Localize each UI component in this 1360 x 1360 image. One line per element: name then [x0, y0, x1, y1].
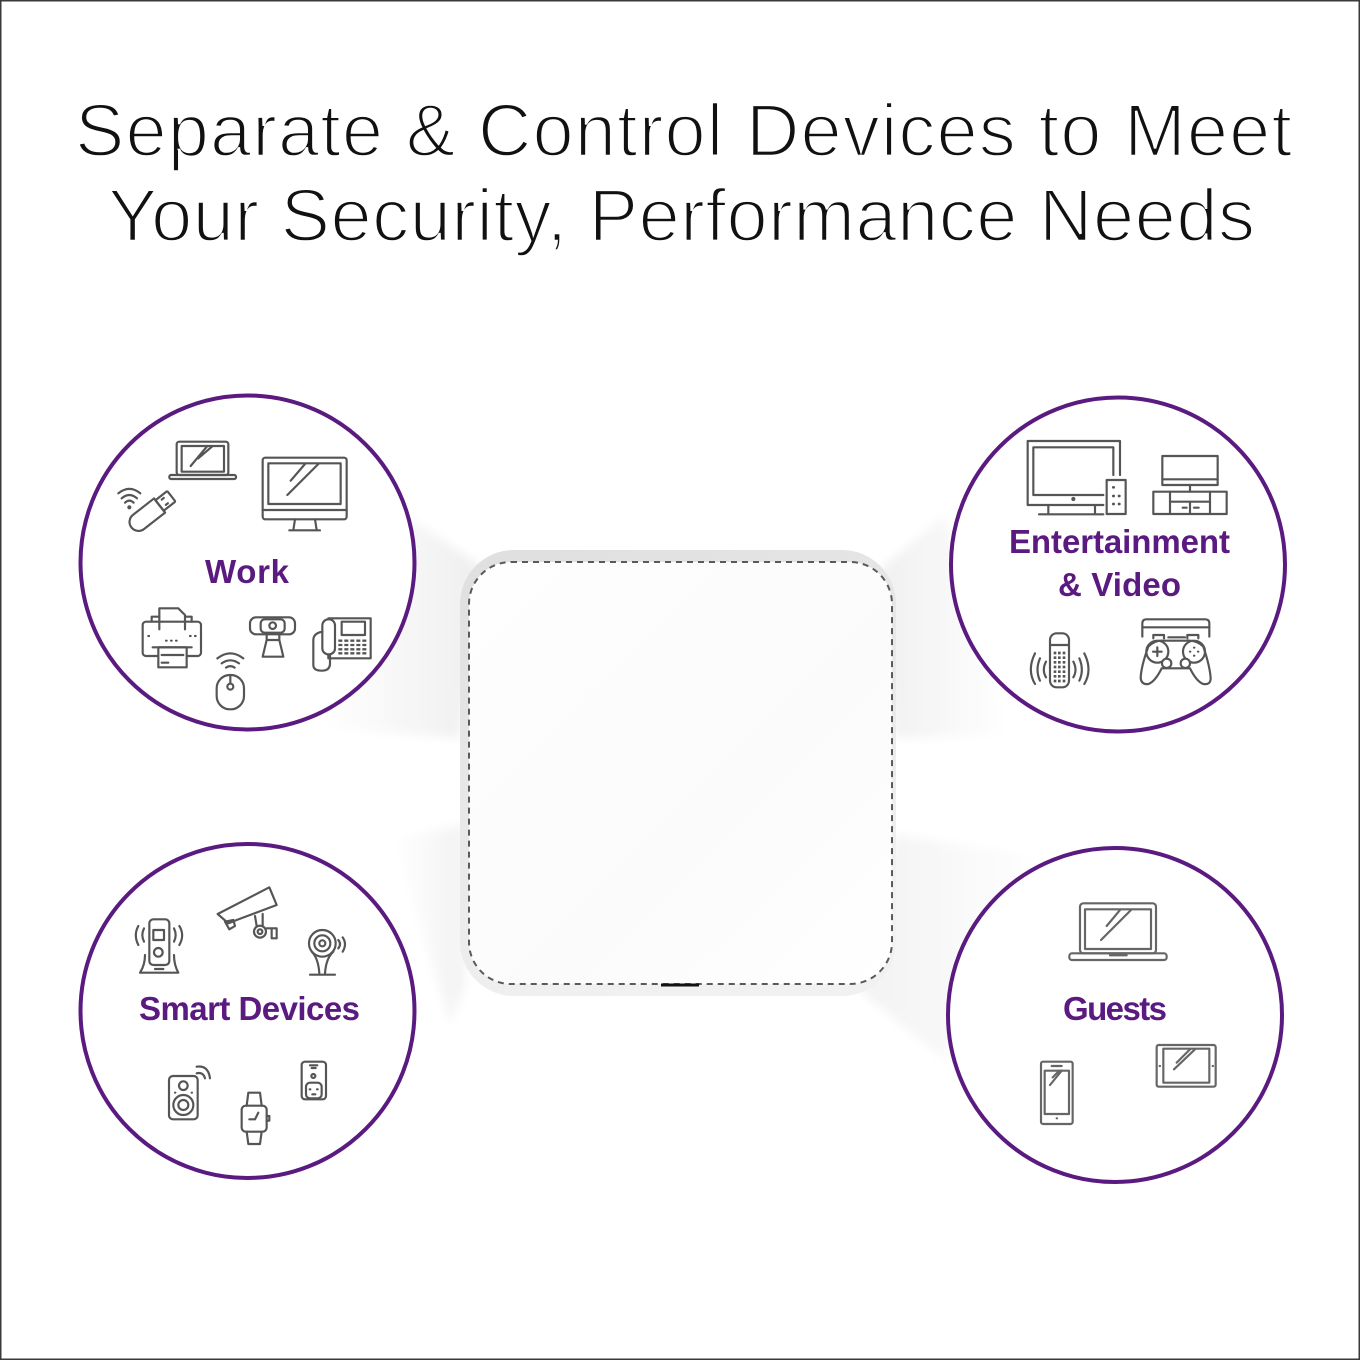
- icon: wireless mouse: [217, 653, 244, 709]
- icon: docked remote: [136, 919, 182, 973]
- entertainment ring: [951, 398, 1285, 732]
- icon: usb wifi: [118, 489, 140, 508]
- guests icons: [1041, 903, 1216, 1124]
- panel: smart devices: [80, 844, 414, 1178]
- status LED: [661, 984, 699, 986]
- icon: guest phone: [1041, 1062, 1073, 1124]
- icon: desktop monitor: [263, 458, 347, 530]
- smart devices ring: [80, 844, 414, 1178]
- icon: guest laptop: [1069, 903, 1167, 960]
- icon: smart watch: [242, 1093, 269, 1144]
- icon: guest tablet: [1157, 1045, 1216, 1087]
- smart devices icons: [136, 887, 345, 1144]
- access point device: [460, 550, 896, 996]
- video heading: & Video: [1058, 566, 1181, 603]
- smart devices heading: Smart Devices: [139, 990, 360, 1027]
- icon: smart plug: [302, 1062, 326, 1099]
- icon: security camera: [218, 887, 277, 938]
- icon: printer: [143, 608, 201, 667]
- work icons: [118, 442, 371, 709]
- icon: game console: [1142, 619, 1209, 638]
- entertainment icons: [1028, 441, 1227, 687]
- icon: game controller: [1141, 641, 1211, 684]
- title: [75, 89, 1292, 257]
- icon: usb stick: [126, 489, 177, 535]
- work ring: [80, 396, 414, 730]
- icon: tv remote: [1107, 480, 1126, 514]
- device body: [460, 550, 896, 996]
- icon: ip camera: [309, 930, 345, 975]
- icon: laptop: [169, 442, 236, 479]
- work heading: Work: [205, 553, 290, 590]
- light beams from access point to the circles: [320, 515, 1040, 1060]
- icon: voice remote: [1031, 633, 1088, 687]
- panel: entertainment and video: [951, 398, 1285, 732]
- icon: desk phone: [313, 618, 371, 671]
- entertainment heading: Entertainment: [1009, 523, 1230, 560]
- icon: smart speaker: [169, 1066, 210, 1119]
- guests heading: Guests: [1063, 990, 1167, 1027]
- panel: work: [80, 396, 414, 730]
- device top face: [469, 562, 892, 984]
- icon: webcam: [250, 617, 295, 657]
- title: Separate & Control Devices to Meet: [75, 89, 1292, 172]
- title: Your Security, Performance Needs: [108, 174, 1255, 257]
- icon: television: [1028, 441, 1120, 514]
- guests ring: [948, 848, 1282, 1182]
- icon: tv cabinet: [1153, 456, 1227, 514]
- panel: guests: [948, 848, 1282, 1182]
